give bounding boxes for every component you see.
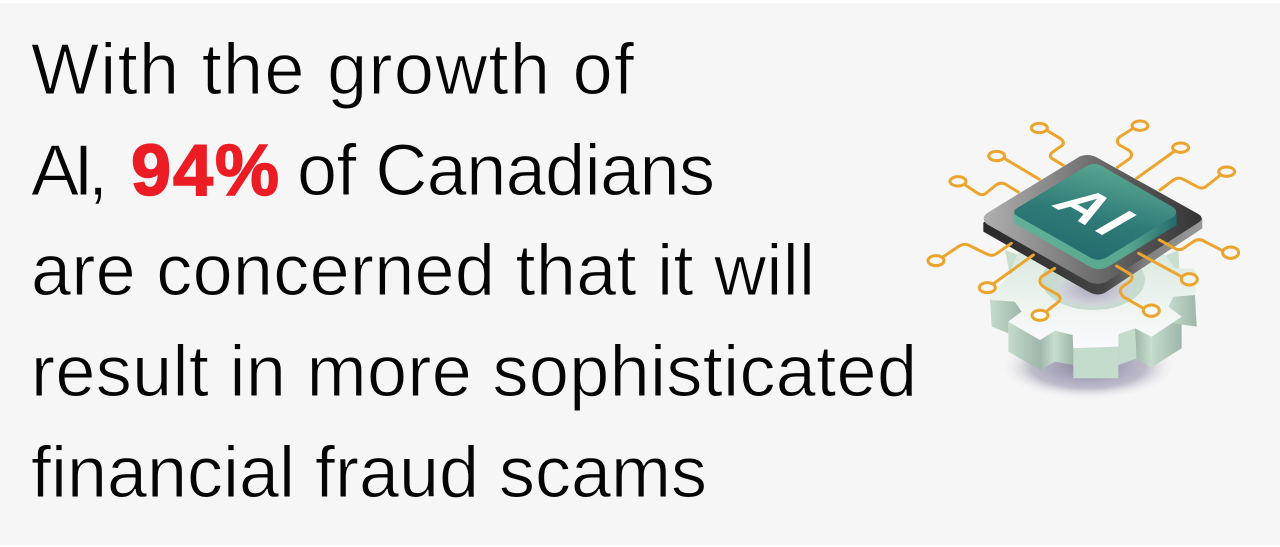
green cap side <box>1013 213 1177 269</box>
line 3: are concerned that it will <box>31 231 815 311</box>
headline text <box>31 30 917 513</box>
gear shadow <box>1000 333 1177 400</box>
line 4: result in more sophisticated <box>31 332 917 412</box>
line 5: financial fraud scams <box>31 433 707 513</box>
chip label: AI <box>1039 179 1155 246</box>
chip top face <box>984 155 1202 284</box>
icon: AI chip over gear <box>928 121 1239 400</box>
gear extruded side <box>990 250 1197 378</box>
line 1: With the growth of <box>31 30 635 110</box>
chip base <box>983 156 1202 294</box>
green cap top <box>1014 164 1176 260</box>
line 2: highlighted statistic: 94% <box>131 131 279 211</box>
gear top face <box>990 240 1197 348</box>
circuit wires <box>928 121 1239 320</box>
line 2: AI: AI, <box>31 131 108 211</box>
gear centre hole <box>1042 250 1145 310</box>
gear hole shadow <box>1052 267 1135 310</box>
line 2: of Canadians: of Canadians <box>297 131 715 211</box>
